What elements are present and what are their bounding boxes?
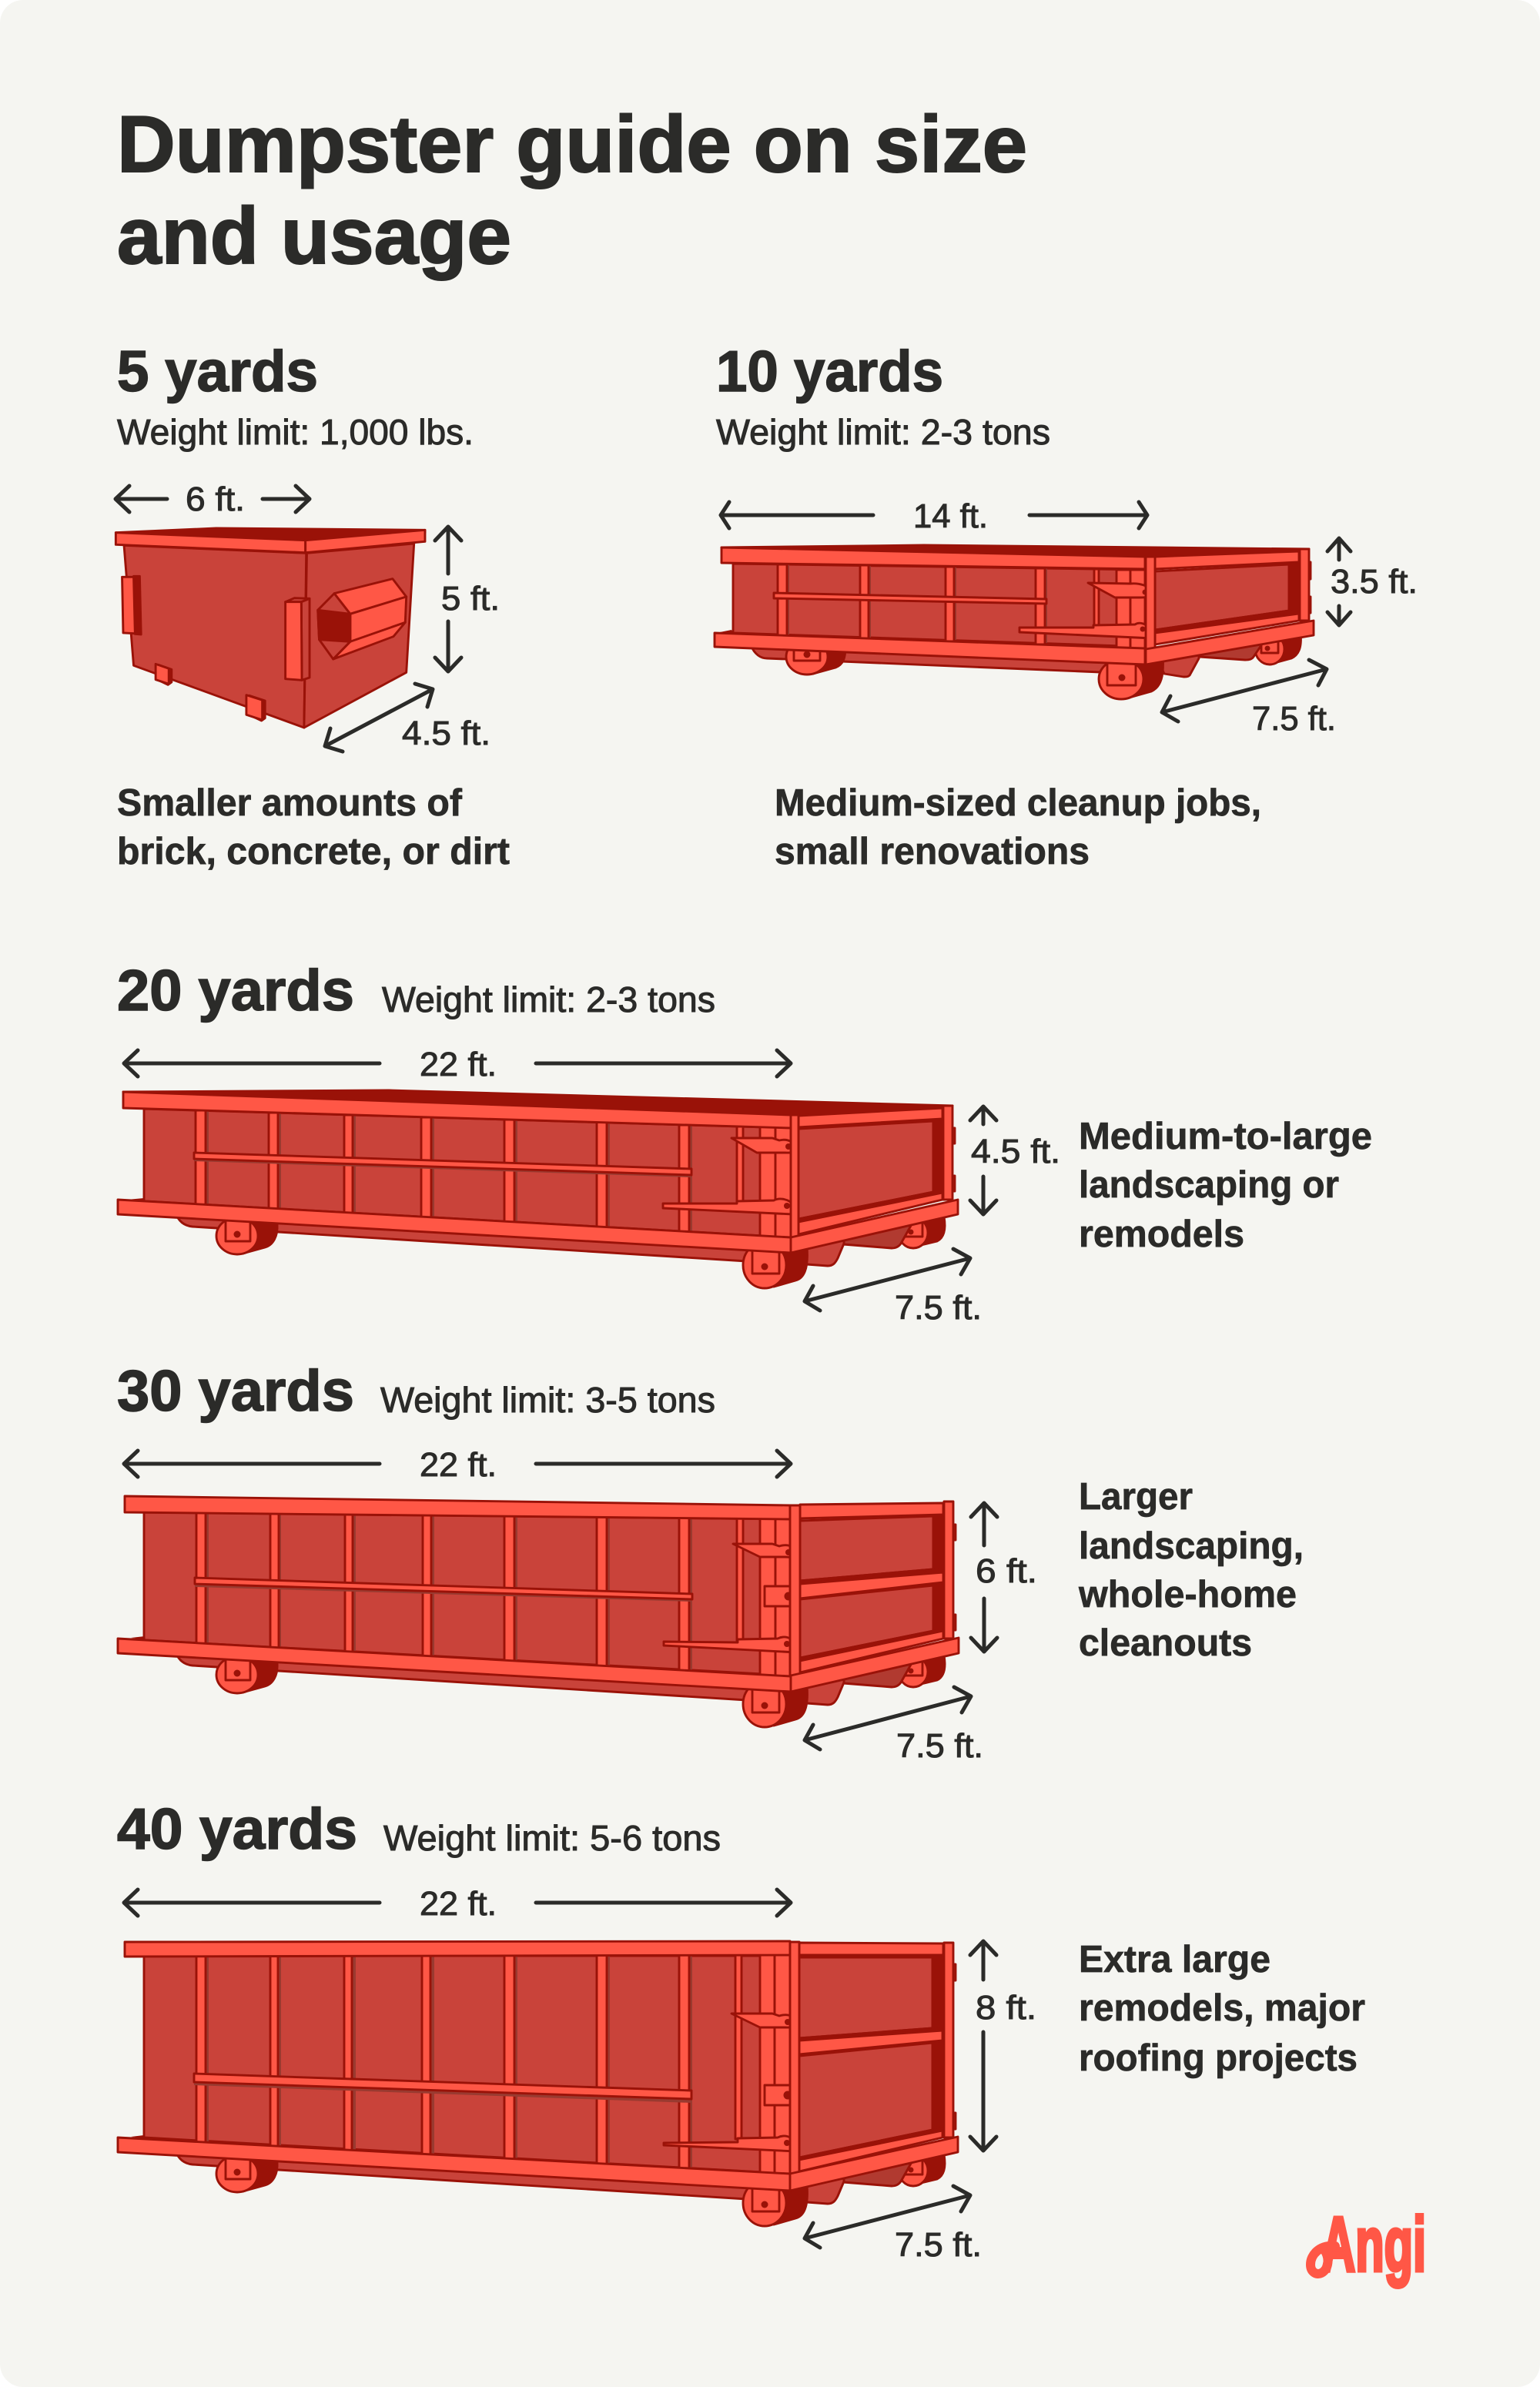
usage: 20 yards: landscaping or	[1079, 1164, 1339, 1206]
illustration: 5 yard dumpster	[116, 528, 425, 728]
usage: 40 yards: roofing projects	[1079, 2037, 1358, 2079]
heading: 10 yards: 10 yards	[716, 339, 943, 403]
arrow: 22 ft length	[124, 1446, 791, 1484]
illustration: 40 yard dumpster	[118, 1941, 958, 2226]
usage: 30 yards: landscaping,	[1079, 1525, 1304, 1567]
usage: 10 yards: small renovations	[775, 831, 1090, 872]
heading: 20 yards: 20 yards	[117, 958, 354, 1023]
usage: 5 yards: brick, concrete, or dirt	[117, 831, 510, 872]
arrow: 22 ft length: 22 ft.	[420, 1446, 497, 1484]
arrow: 8 ft height	[970, 1941, 1036, 2151]
undercarriage and wheels	[176, 2139, 945, 2226]
usage: 30 yards: whole-home	[1078, 1574, 1297, 1615]
usage: 5 yards: Smaller amounts of	[117, 782, 463, 824]
panel: 30 yards	[117, 1358, 1304, 1765]
usage: 40 yards	[1079, 1939, 1365, 2079]
arrow: 3.5 ft height: 3.5 ft.	[1331, 563, 1418, 601]
weight limit: 5 yards: Weight limit: 1,000 lbs.	[117, 412, 474, 452]
arrow: 22 ft length: 22 ft.	[420, 1885, 497, 1923]
arrow: 7.5 ft depth: 7.5 ft.	[895, 1289, 982, 1327]
arrow: 7.5 ft depth: 7.5 ft.	[896, 1727, 983, 1765]
usage: 40 yards: Extra large	[1079, 1939, 1270, 1980]
logo: Angi	[1311, 2201, 1426, 2288]
panel: 20 yards	[117, 958, 1372, 1327]
arrow: 7.5 ft depth	[805, 2186, 982, 2264]
title: and usage	[117, 192, 511, 281]
usage: 10 yards: Medium-sized cleanup jobs,	[775, 782, 1261, 824]
arrow: 7.5 ft depth: 7.5 ft.	[895, 2226, 982, 2264]
title: Dumpster guide on size	[117, 100, 1027, 189]
arrow: 4.5 ft height	[970, 1106, 1060, 1214]
arrow: 7.5 ft depth	[1162, 660, 1336, 738]
arrow: 22 ft length: 22 ft.	[420, 1046, 497, 1083]
arrow: 5 ft height: 5 ft.	[441, 580, 500, 618]
arrow: 6 ft width: 6 ft.	[186, 480, 245, 518]
arrow: 14 ft length	[721, 497, 1147, 535]
arrow: 7.5 ft depth	[805, 1249, 982, 1327]
arrow: 22 ft length	[124, 1046, 791, 1083]
arrow: 7.5 ft depth: 7.5 ft.	[1252, 700, 1336, 738]
arrow: 4.5 ft depth: 4.5 ft.	[402, 715, 490, 752]
arrow: 7.5 ft depth	[805, 1687, 983, 1765]
usage: 40 yards: remodels, major	[1079, 1987, 1365, 2029]
arrow: 4.5 ft height: 4.5 ft.	[971, 1133, 1060, 1170]
usage: 10 yards	[775, 782, 1261, 872]
panel: 40 yards	[117, 1796, 1365, 2264]
undercarriage and wheels	[176, 1640, 945, 1727]
arrow: 5 ft height	[435, 527, 500, 671]
arrow: 6 ft height	[971, 1503, 1037, 1652]
arrow: 22 ft length	[124, 1885, 791, 1923]
usage: 5 yards	[117, 782, 510, 872]
weight limit: 30 yards: Weight limit: 3-5 tons	[380, 1380, 715, 1420]
usage: 30 yards	[1078, 1476, 1304, 1664]
usage: 20 yards	[1079, 1116, 1372, 1255]
illustration: 10 yard dumpster	[715, 545, 1314, 699]
undercarriage and wheels	[176, 1201, 945, 1288]
panel: 10 yards	[715, 339, 1418, 872]
heading: 40 yards: 40 yards	[117, 1796, 357, 1861]
arrow: 6 ft height: 6 ft.	[976, 1552, 1037, 1590]
weight limit: 20 yards: Weight limit: 2-3 tons	[382, 979, 715, 1019]
illustration: 30 yard dumpster	[118, 1496, 959, 1727]
logo: Angi: Angi	[1321, 2201, 1426, 2288]
usage: 20 yards: remodels	[1079, 1214, 1244, 1255]
title	[117, 100, 1027, 281]
heading: 30 yards: 30 yards	[117, 1358, 354, 1423]
usage: 30 yards: cleanouts	[1079, 1622, 1252, 1664]
arrow: 14 ft length: 14 ft.	[913, 497, 988, 535]
arrow: 6 ft width	[116, 480, 310, 518]
arrow: 3.5 ft height	[1327, 538, 1418, 625]
illustration: 20 yard dumpster	[118, 1090, 958, 1288]
usage: 30 yards: Larger	[1079, 1476, 1193, 1518]
weight limit: 10 yards: Weight limit: 2-3 tons	[716, 412, 1050, 452]
panel: 5 yards	[116, 339, 510, 872]
weight limit: 40 yards: Weight limit: 5-6 tons	[383, 1818, 721, 1858]
arrow: 8 ft height: 8 ft.	[976, 1989, 1036, 2027]
usage: 20 yards: Medium-to-large	[1079, 1116, 1372, 1157]
heading: 5 yards: 5 yards	[117, 339, 318, 403]
arrow: 4.5 ft depth	[325, 684, 490, 752]
